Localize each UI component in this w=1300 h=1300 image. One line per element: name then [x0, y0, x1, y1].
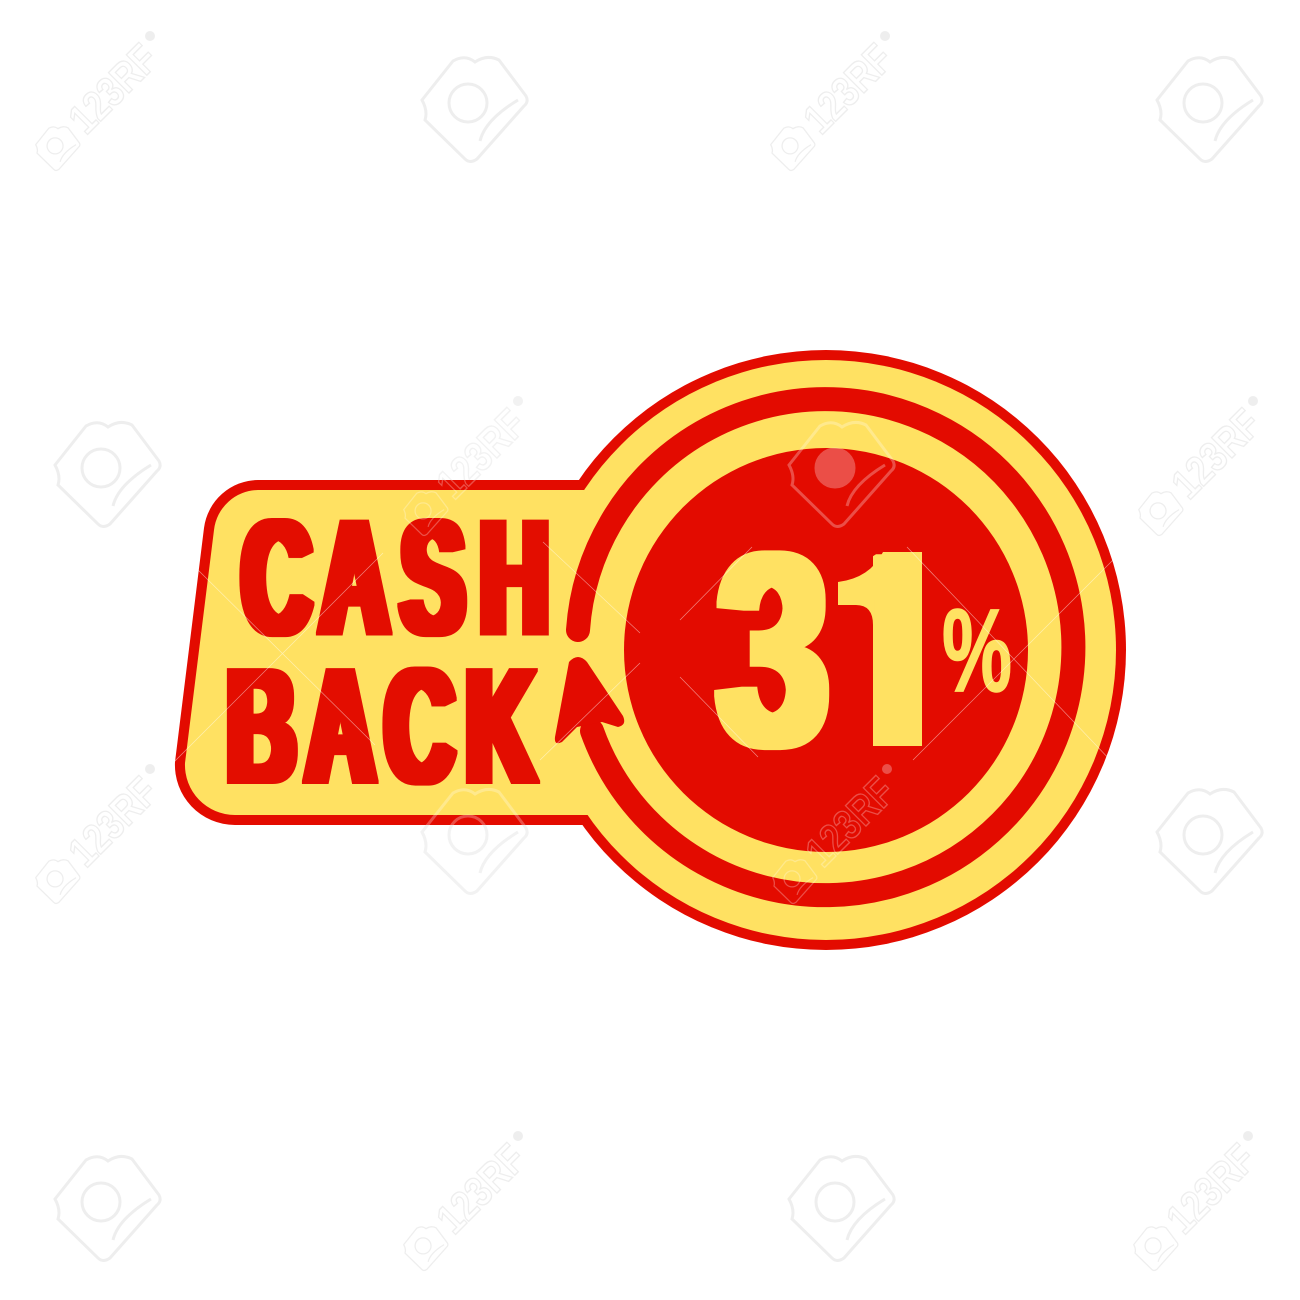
- circular arrow: [555, 399, 1073, 895]
- heading: cash back: [227, 487, 549, 818]
- discount value: 31%: %: [942, 585, 1012, 717]
- inner red disc: [624, 448, 1028, 852]
- badge yellow fill: [185, 360, 1116, 940]
- watermark: translucent stamps over badge: [404, 396, 904, 903]
- heading: cash back: CASH: [242, 487, 549, 669]
- heading: cash back: BACK: [227, 636, 535, 818]
- watermark: hairlines over badge: [173, 542, 1113, 763]
- discount value: 31%: 3: [717, 497, 829, 802]
- discount value: 31%: 1: [818, 500, 968, 801]
- cash back badge: [175, 350, 1126, 950]
- discount value: 31%: [714, 550, 1010, 750]
- badge outer red outline: [175, 350, 1126, 950]
